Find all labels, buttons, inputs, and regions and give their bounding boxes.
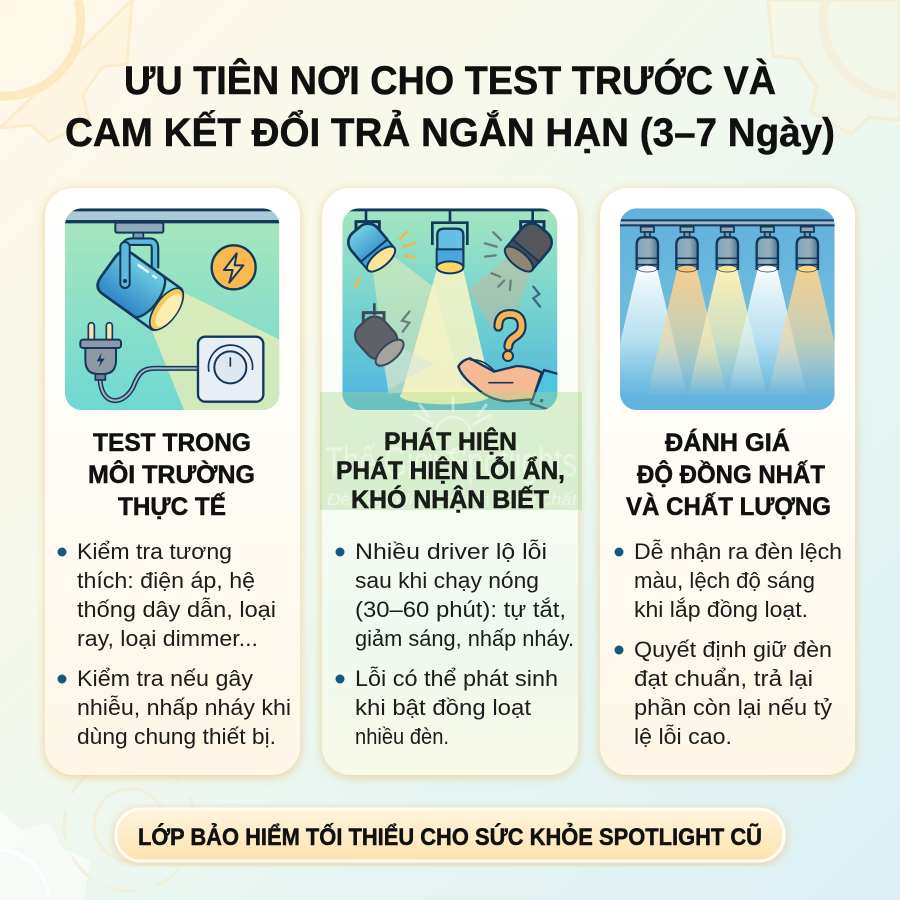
lamp row (637, 227, 818, 272)
heading 1: MÔI TRƯỜNG (88, 459, 255, 489)
illustration: spotlight, plug and dimmer (65, 208, 279, 410)
hand (458, 358, 542, 401)
footer banner: LỚP BẢO HIỂM TỐI THIỂU CHO SỨC KHỎE SPOTLIGHT CŨ (138, 822, 762, 851)
heading 2: KHÓ NHẬN BIẾT (351, 484, 549, 514)
bullets 3: màu, lệch độ sáng (634, 568, 815, 593)
heading 2: PHÁT HIỆN (384, 426, 517, 456)
panel: uniformity and quality (600, 188, 855, 775)
heading 3 (626, 428, 831, 521)
heading 2 (336, 426, 565, 514)
bullets 1: ray, loại dimmer... (77, 626, 258, 651)
question mark (498, 314, 522, 347)
bullets 1: nhiễu, nhấp nháy khi (77, 695, 291, 720)
bullets 1: Kiểm tra nếu gây (77, 666, 253, 691)
footer banner (116, 809, 784, 861)
panel: test in real environment (45, 188, 300, 775)
bullets 3: Quyết định giữ đèn (634, 637, 832, 662)
illustration: five spotlights in a row (620, 208, 835, 410)
bullets 3: phần còn lại nếu tỷ (634, 695, 832, 720)
bullets 3: Dễ nhận ra đèn lệch (634, 539, 842, 564)
heading 2: PHÁT HIỆN LỖI ẨN, (336, 455, 565, 485)
heading 3: ĐÁNH GIÁ (665, 428, 790, 457)
bullets 2: giảm sáng, nhấp nháy. (355, 626, 574, 651)
bullets 2: Lỗi có thể phát sinh (355, 666, 558, 691)
lamp right, off (521, 222, 544, 247)
bullets 2: nhiều đèn. (355, 724, 449, 749)
card background 2 (322, 188, 578, 775)
heading 1: THỰC TẾ (118, 492, 226, 521)
bullets 1 (58, 539, 291, 749)
bullets 1: thích: điện áp, hệ (77, 568, 255, 593)
bullets 2: (30–60 phút): tự tắt, (355, 597, 566, 622)
bullets 1: thống dây dẫn, loại (77, 597, 276, 622)
bullets 3: đạt chuẩn, trả lại (634, 666, 813, 691)
cuff clipped (531, 370, 562, 410)
bullets 3 (614, 539, 842, 749)
watermark (320, 392, 582, 510)
bullets 3: lệ lỗi cao. (634, 724, 732, 749)
bullets 2 (336, 539, 574, 749)
bullets 2: sau khi chạy nóng (355, 568, 539, 593)
bullets 2: khi bật đồng loạt (355, 695, 531, 720)
heading 1 (88, 429, 255, 521)
lamp lower left, off (370, 303, 378, 315)
card background 3 (600, 188, 855, 775)
bullets 3: khi lắp đồng loạt. (634, 597, 808, 622)
title: CAM KẾT ĐỔI TRẢ NGẮN HẠN (3–7 Ngày) (65, 110, 835, 155)
panel: hidden defects (320, 188, 582, 775)
heading 1: TEST TRONG (93, 429, 251, 457)
lamp left (356, 222, 379, 247)
heading 3: VÀ CHẤT LƯỢNG (626, 492, 831, 521)
bullets 2: Nhiều driver lộ lỗi (355, 539, 547, 564)
spark marks (355, 232, 540, 332)
card background 1 (45, 188, 300, 775)
watermark: Đèn Spotlight chính hãng chất (327, 490, 578, 509)
lamp centre (432, 223, 467, 245)
title: ƯU TIÊN NƠI CHO TEST TRƯỚC VÀ (124, 59, 776, 103)
illustration: faulty spotlights and question mark (342, 208, 562, 410)
watermark: Thế Giới Spotlights (325, 438, 577, 485)
bullets 1: dùng chung thiết bị. (77, 724, 276, 749)
bullets 1: Kiểm tra tương (77, 539, 232, 564)
heading 3: ĐỘ ĐỒNG NHẤT (637, 459, 825, 489)
title (65, 59, 835, 155)
